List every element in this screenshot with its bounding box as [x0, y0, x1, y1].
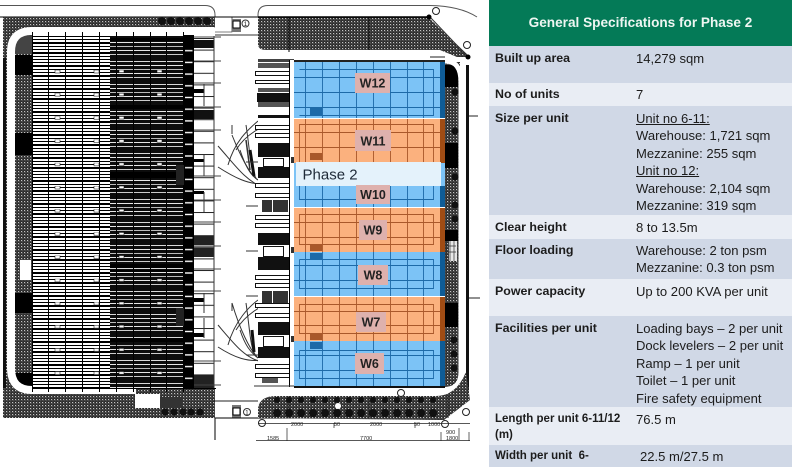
label W11: W11: [360, 134, 386, 148]
dimension lines: 1585: [267, 436, 279, 442]
small white markers in warehouse: [32, 70, 183, 380]
Phase 2 overlay band: Phase 2: [302, 166, 358, 184]
row: number of units: [489, 83, 792, 106]
row: length per unit: Length per unit 6-11/12: [495, 413, 620, 425]
row: width per unit: 22.5 m/27.5 m: [640, 449, 723, 464]
left warehouse block: dark half: [110, 36, 183, 388]
left perimeter road: [11, 31, 214, 390]
unit W10 fill: [294, 163, 445, 207]
label W7: [356, 312, 386, 332]
right loading docks: [246, 58, 296, 387]
table heading: General Specifications for Phase 2: [529, 15, 752, 30]
label W10: W10: [360, 188, 386, 202]
unit edge bands: [294, 60, 445, 388]
row: floor loading: [489, 239, 792, 279]
label W9: [359, 220, 387, 240]
row: facilities per unit: Toilet – 1 per unit: [636, 373, 735, 388]
gatehouse top: 1: [244, 22, 248, 28]
row: facilities per unit: Ramp – 1 per unit: [636, 356, 740, 371]
row: width per unit: Width per unit 6-: [495, 450, 589, 462]
left site road outline: [0, 6, 258, 17]
right bottom hatched band: [258, 372, 470, 428]
orange unit grid lines: [294, 119, 440, 341]
gatehouse bottom: [214, 401, 300, 440]
row: clear height: 8 to 13.5m: [636, 220, 698, 235]
row: size per unit: Size per unit: [495, 111, 569, 125]
label W12: W12: [360, 76, 385, 90]
left building surround hatching: [3, 17, 215, 418]
landscape tree circles: [158, 17, 211, 416]
row: size per unit: Warehouse: 2,104 sqm: [636, 181, 770, 196]
site plan drawing: [0, 5, 480, 442]
row: built up area: Built up area: [495, 51, 570, 65]
panel: general specifications table: [489, 0, 792, 467]
row: facilities per unit: [489, 316, 792, 407]
dimension lines: 50: [334, 422, 340, 428]
right top hatched band: [258, 8, 470, 60]
row: width per unit: [489, 445, 792, 467]
row: power capacity: Power capacity: [495, 284, 585, 298]
unit W12 fill: [294, 62, 445, 118]
row: clear height: Clear height: [495, 220, 567, 234]
gatehouse bottom: 1: [245, 410, 249, 416]
unit W6 fill: [294, 341, 445, 386]
row: built up area: [489, 46, 792, 83]
dimension lines: 7700: [360, 436, 372, 442]
dimension lines: [256, 422, 470, 442]
row: built up area: 14,279 sqm: [636, 51, 704, 66]
row: size per unit: Mezzanine: 255 sqm: [636, 146, 756, 161]
row: length per unit: [489, 407, 792, 445]
unit W7 fill: [294, 297, 445, 341]
row: power capacity: [489, 279, 792, 316]
left warehouse block: light half: [32, 36, 110, 388]
Phase 2 overlay band: [296, 162, 441, 186]
row: facilities per unit: Fire safety equipment: [636, 391, 761, 406]
label W10: [356, 185, 390, 204]
dimension lines: 1000: [428, 422, 440, 428]
row: length per unit: 76.5 m: [636, 412, 676, 427]
label W9: W9: [364, 224, 382, 238]
row: number of units: No of units: [495, 87, 560, 101]
row: facilities per unit: Dock levelers – 2 per unit: [636, 338, 783, 353]
structural column lines: [32, 32, 216, 392]
row: size per unit: Unit no 12:: [636, 163, 699, 178]
label W7: W7: [362, 316, 380, 330]
row: facilities per unit: Loading bays – 2 per unit: [636, 321, 783, 336]
label W6: [355, 353, 384, 374]
unit W8 fill: [294, 252, 445, 296]
right side strip: [430, 57, 480, 400]
dimension lines: 1800: [446, 436, 458, 442]
row: floor loading: Warehouse: 2 ton psm: [636, 243, 767, 258]
dimension lines: 2000: [370, 422, 382, 428]
label W8: [358, 265, 388, 285]
row: power capacity: Up to 200 KVA per unit: [636, 284, 768, 299]
dimension lines: 50: [414, 422, 420, 428]
row: length per unit: (m): [495, 429, 513, 441]
row: floor loading: Floor loading: [495, 243, 573, 257]
label W11: [355, 130, 391, 151]
row: floor loading: Mezzanine: 0.3 ton psm: [636, 260, 775, 275]
row: number of units: 7: [636, 87, 643, 102]
label W6: W6: [360, 357, 379, 371]
row: size per unit: Warehouse: 1,721 sqm: [636, 128, 770, 143]
table heading: [489, 0, 792, 46]
row: facilities per unit: Facilities per unit: [495, 321, 597, 335]
black service column: [176, 35, 194, 389]
label W12: [355, 73, 390, 93]
left loading docks: [194, 36, 221, 388]
row: clear height: [489, 215, 792, 239]
unit W9 fill: [294, 208, 445, 252]
dimension lines: 2000: [291, 422, 303, 428]
unit W11 fill: [294, 119, 445, 163]
label W8: W8: [364, 268, 382, 282]
row: size per unit: [489, 106, 792, 215]
turning curves upper: [218, 121, 278, 362]
dimension lines: 900: [446, 430, 455, 436]
row: size per unit: Unit no 6-11:: [636, 111, 710, 126]
row: size per unit: Mezzanine: 319 sqm: [636, 198, 756, 213]
gatehouse top: [215, 17, 258, 35]
blue unit grid lines: [294, 62, 440, 386]
right site road outline: [258, 6, 477, 17]
